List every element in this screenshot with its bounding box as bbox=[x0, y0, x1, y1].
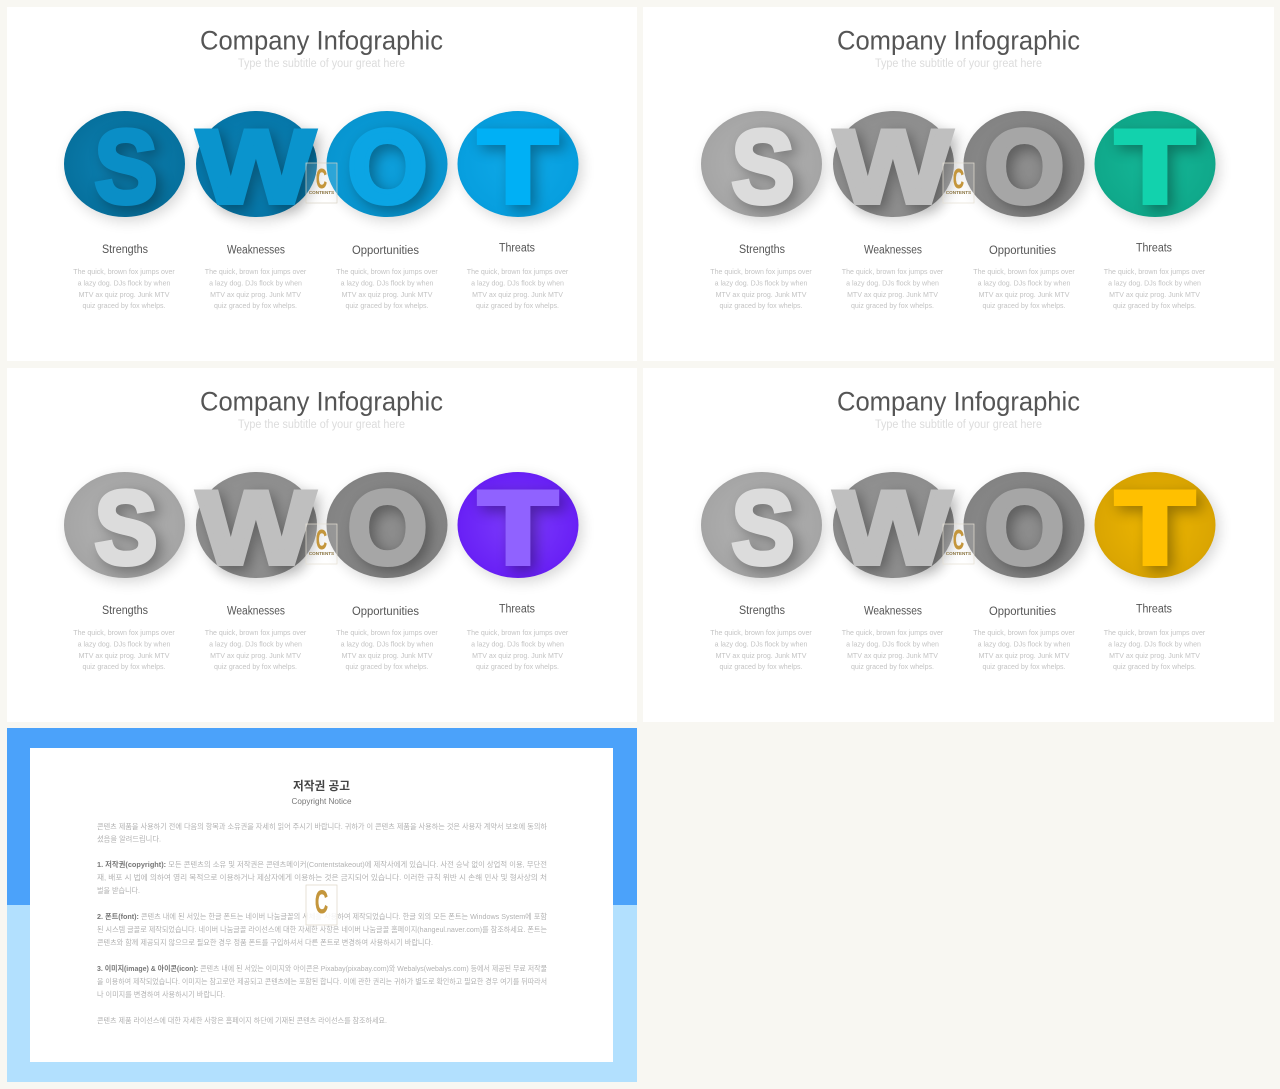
watermark: C bbox=[316, 163, 327, 194]
text: Opportunities: a lazy dog. DJs flock by when bbox=[341, 642, 433, 648]
text: Strengths: a lazy dog. DJs flock by when bbox=[78, 280, 170, 288]
text: Threats: a lazy dog. DJs flock by when bbox=[471, 642, 564, 648]
text: Strengths: a lazy dog. DJs flock by when bbox=[715, 280, 807, 288]
watermark: C bbox=[953, 163, 964, 194]
circle S: S bbox=[100, 114, 162, 230]
text: Weaknesses bbox=[205, 269, 307, 310]
text: Opportunities: MTV ax quiz prog. Junk MTV bbox=[979, 653, 1070, 660]
section 1: copyright: 벌을 받습니다. bbox=[97, 886, 140, 895]
circle O bbox=[964, 110, 1088, 230]
text: Opportunities: a lazy dog. DJs flock by when bbox=[978, 280, 1070, 288]
section 2: font bbox=[97, 912, 547, 947]
text: Strengths: MTV ax quiz prog. Junk MTV bbox=[716, 653, 807, 660]
text: Threats: quiz graced by fox whelps. bbox=[476, 664, 559, 671]
section 2: font: 콘텐츠와 함께 제공되지 않으므로 필요한 경우 정품 폰트를 구입하셔서 다른 폰트로 변경하여 사용하시기 바랍니다. bbox=[97, 938, 433, 947]
title: Company Infographic bbox=[200, 26, 443, 56]
circle T: T bbox=[478, 470, 558, 586]
copyright intro: 셨음을 알려드립니다. bbox=[97, 834, 161, 844]
circle T: T bbox=[1116, 470, 1194, 586]
text: Weaknesses: quiz graced by fox whelps. bbox=[214, 664, 297, 671]
circle T bbox=[1094, 110, 1219, 230]
section 3: image and icon: 나 이미지를 변경하여 사용하시기 바랍니다. bbox=[97, 990, 225, 999]
circle T: T bbox=[1116, 110, 1194, 226]
label: Opportunities: Opportunities bbox=[989, 245, 1056, 257]
label: Threats: Threats bbox=[499, 604, 535, 616]
watermark: CONTENTS bbox=[309, 190, 334, 195]
text: Weaknesses: a lazy dog. DJs flock by when bbox=[846, 642, 939, 648]
text: Threats: MTV ax quiz prog. Junk MTV bbox=[1109, 292, 1200, 299]
title: Company Infographic bbox=[837, 26, 1080, 56]
text: Threats: quiz graced by fox whelps. bbox=[476, 303, 559, 310]
text: Strengths: MTV ax quiz prog. Junk MTV bbox=[79, 653, 170, 660]
text: Threats: quiz graced by fox whelps. bbox=[1113, 303, 1196, 310]
label: Strengths: Strengths bbox=[739, 605, 785, 617]
text: Threats: MTV ax quiz prog. Junk MTV bbox=[472, 653, 563, 660]
circle S: S bbox=[94, 470, 158, 586]
watermark bbox=[943, 163, 974, 203]
text: Threats bbox=[1104, 269, 1206, 310]
circle W: W bbox=[202, 476, 320, 592]
label: Strengths: Strengths bbox=[739, 244, 785, 256]
watermark bbox=[943, 524, 974, 564]
text: Weaknesses: a lazy dog. DJs flock by when bbox=[846, 280, 939, 288]
watermark: CONTENTS bbox=[946, 551, 971, 556]
copyright subheading: Copyright Notice bbox=[292, 796, 352, 806]
circle O: O bbox=[990, 114, 1070, 230]
text: Strengths bbox=[73, 269, 175, 310]
text: Opportunities bbox=[973, 630, 1075, 671]
text: Weaknesses bbox=[205, 630, 307, 671]
subtitle: Type the subtitle of your great here bbox=[875, 419, 1042, 431]
text: Opportunities: a lazy dog. DJs flock by when bbox=[341, 280, 433, 288]
text: Threats: quiz graced by fox whelps. bbox=[1113, 664, 1196, 671]
text: Threats: MTV ax quiz prog. Junk MTV bbox=[472, 292, 563, 299]
text: Opportunities bbox=[336, 269, 438, 310]
text: Weaknesses: The quick, brown fox jumps over bbox=[205, 630, 307, 637]
circle W: W bbox=[202, 114, 320, 230]
circle W: W bbox=[202, 114, 320, 230]
text: Weaknesses: MTV ax quiz prog. Junk MTV bbox=[210, 292, 301, 299]
section 1: copyright bbox=[97, 860, 547, 895]
label: Weaknesses: Weaknesses bbox=[227, 606, 285, 618]
section 2: font: 된 시스템 글꼴로 제작되었습니다. 네이버 나눔글꼴 라이선스에 대한 자세한 사항은 네이버 나눔글꼴 홈페이지(hangeul.naver.com)를 참조하세요. 폰트는 bbox=[97, 925, 547, 934]
text: Threats bbox=[467, 630, 569, 671]
label: Threats: Threats bbox=[1136, 604, 1172, 616]
section 3: image and icon: 을 이용하여 제작되었습니다. 이미지는 참고로만 제공되고 콘텐츠에는 포함된 합니다. 이에 관한 권리는 귀하가 별도로 확인하고 필요한 경우 여기를 뒤따라서 bbox=[97, 977, 547, 986]
text: Opportunities: a lazy dog. DJs flock by when bbox=[978, 642, 1070, 648]
title: Company Infographic bbox=[837, 386, 1080, 416]
circle S: S bbox=[732, 110, 794, 226]
panel: SWOT green bbox=[643, 7, 1274, 361]
watermark: C bbox=[315, 884, 328, 920]
text: Threats bbox=[1104, 630, 1206, 671]
text: Strengths: The quick, brown fox jumps over bbox=[710, 269, 812, 276]
title: Company Infographic bbox=[200, 386, 443, 416]
text: Weaknesses: MTV ax quiz prog. Junk MTV bbox=[210, 653, 301, 660]
watermark bbox=[306, 884, 337, 925]
section 1: copyright: 1. 저작권(copyright): 모든 콘텐츠의 소유 및 저작권은 콘텐츠메이커(Contentstakeout)에 제작사에게 있습니다. 사전 승낙 없이 상업적 이용, 무단전 bbox=[97, 860, 547, 869]
panel: SWOT purple bbox=[7, 368, 637, 722]
section 1: copyright: 재, 배포 시 법에 의하여 영리 목적으로 이용하거나 제삼자에게 이용하는 것은 금지되어 있습니다. 이러한 규칙 위반 시 손해 민사 및 형사상의 처 bbox=[97, 873, 547, 882]
label: Strengths: Strengths bbox=[102, 605, 148, 617]
text: Weaknesses bbox=[842, 630, 944, 671]
section 3: image and icon bbox=[97, 964, 547, 999]
circle W: W bbox=[198, 110, 315, 226]
circle O: O bbox=[352, 114, 432, 230]
text: Opportunities bbox=[973, 269, 1075, 310]
text: Strengths bbox=[73, 630, 175, 671]
circle O bbox=[326, 470, 451, 592]
label: Strengths: Strengths bbox=[102, 244, 148, 256]
circle O bbox=[964, 470, 1088, 592]
circle T bbox=[458, 110, 582, 230]
text: Opportunities: MTV ax quiz prog. Junk MTV bbox=[342, 653, 433, 660]
circle T: T bbox=[484, 476, 562, 592]
text: Opportunities: quiz graced by fox whelps. bbox=[982, 664, 1066, 671]
text: Threats: a lazy dog. DJs flock by when bbox=[1108, 642, 1201, 648]
text: Opportunities bbox=[336, 630, 438, 671]
circle T: T bbox=[484, 114, 562, 230]
text: Weaknesses: quiz graced by fox whelps. bbox=[851, 303, 934, 310]
text: Strengths: quiz graced by fox whelps. bbox=[719, 303, 803, 310]
circle O: O bbox=[984, 110, 1064, 226]
watermark bbox=[306, 524, 337, 564]
text: Opportunities: MTV ax quiz prog. Junk MTV bbox=[979, 292, 1070, 299]
text: Threats: a lazy dog. DJs flock by when bbox=[471, 280, 564, 288]
copyright intro bbox=[97, 822, 547, 844]
label: Weaknesses: Weaknesses bbox=[227, 244, 285, 256]
circle W: W bbox=[840, 114, 957, 230]
circle S: S bbox=[732, 470, 794, 586]
subtitle: Type the subtitle of your great here bbox=[238, 58, 405, 70]
text: Weaknesses: a lazy dog. DJs flock by when bbox=[209, 280, 302, 288]
text: Weaknesses: The quick, brown fox jumps over bbox=[205, 269, 307, 276]
circle T: T bbox=[478, 110, 558, 226]
copyright heading: 저작권 공고 bbox=[293, 778, 350, 793]
text: Strengths: a lazy dog. DJs flock by when bbox=[78, 642, 170, 648]
text: Strengths: The quick, brown fox jumps over bbox=[73, 630, 175, 637]
text: Weaknesses bbox=[842, 269, 944, 310]
copyright intro: 콘텐츠 제품을 사용하기 전에 다음의 항목과 소유권을 자세히 읽어 주시기 바랍니다. 귀하가 이 콘텐츠 제품을 사용하는 것은 사용자 계약서 보호에 동의하 bbox=[97, 822, 547, 831]
label: Threats: Threats bbox=[499, 242, 535, 254]
text: Threats: The quick, brown fox jumps over bbox=[1104, 630, 1206, 637]
text: Weaknesses: MTV ax quiz prog. Junk MTV bbox=[847, 292, 938, 299]
text: Strengths: quiz graced by fox whelps. bbox=[719, 664, 803, 671]
panel: SWOT blue bbox=[7, 7, 637, 361]
section 3: image and icon: 3. 이미지(image) & 아이콘(icon): 콘텐츠 내에 된 서있는 이미지와 아이콘은 Pixabay(pixabay.com)와 Webalys(webalys.com) 등에서 제공된 무료 저작물 bbox=[97, 964, 547, 973]
circle S: S bbox=[736, 476, 800, 592]
text: Opportunities: The quick, brown fox jumps over bbox=[973, 630, 1075, 637]
circle S: S bbox=[94, 110, 158, 226]
circle S: S bbox=[100, 476, 162, 592]
circle S bbox=[701, 470, 825, 592]
watermark bbox=[306, 163, 337, 203]
label: Opportunities: Opportunities bbox=[352, 606, 419, 618]
circle S bbox=[64, 470, 188, 592]
text: Strengths: MTV ax quiz prog. Junk MTV bbox=[716, 292, 807, 299]
circle O: O bbox=[984, 470, 1064, 586]
text: Strengths bbox=[710, 630, 812, 671]
text: Weaknesses: a lazy dog. DJs flock by when bbox=[209, 642, 302, 648]
circle T: T bbox=[1120, 114, 1200, 230]
subtitle: Type the subtitle of your great here bbox=[238, 419, 405, 431]
panel: copyright notice bbox=[7, 728, 637, 1082]
text: Strengths: The quick, brown fox jumps over bbox=[710, 630, 812, 637]
circle W: W bbox=[840, 114, 957, 230]
text: Threats: The quick, brown fox jumps over bbox=[467, 630, 569, 637]
label: Threats: Threats bbox=[1136, 242, 1172, 254]
text: Opportunities: MTV ax quiz prog. Junk MTV bbox=[342, 292, 433, 299]
circle S: S bbox=[736, 114, 800, 230]
subtitle: Type the subtitle of your great here bbox=[875, 58, 1042, 70]
text: Strengths: quiz graced by fox whelps. bbox=[82, 664, 166, 671]
label: Weaknesses: Weaknesses bbox=[864, 244, 922, 256]
text: Strengths: MTV ax quiz prog. Junk MTV bbox=[79, 292, 170, 299]
watermark: C bbox=[316, 524, 327, 555]
text: Opportunities: quiz graced by fox whelps. bbox=[345, 303, 429, 310]
circle S bbox=[64, 110, 188, 230]
text: Weaknesses: quiz graced by fox whelps. bbox=[214, 303, 297, 310]
circle T bbox=[458, 470, 582, 592]
circle W: W bbox=[840, 476, 957, 592]
text: Weaknesses: MTV ax quiz prog. Junk MTV bbox=[847, 653, 938, 660]
circle W: W bbox=[840, 476, 957, 592]
label: Opportunities: Opportunities bbox=[989, 606, 1056, 618]
label: Weaknesses: Weaknesses bbox=[864, 606, 922, 618]
circle T bbox=[1094, 470, 1219, 592]
text: Threats: The quick, brown fox jumps over bbox=[467, 269, 569, 276]
text: Strengths: a lazy dog. DJs flock by when bbox=[715, 642, 807, 648]
text: Threats: a lazy dog. DJs flock by when bbox=[1108, 280, 1201, 288]
text: Opportunities: The quick, brown fox jumps over bbox=[336, 269, 438, 276]
text: Strengths: quiz graced by fox whelps. bbox=[82, 303, 166, 310]
text: Opportunities: quiz graced by fox whelps. bbox=[982, 303, 1066, 310]
panel: SWOT yellow bbox=[643, 368, 1274, 722]
closing note: 콘텐츠 제품 라이선스에 대한 자세한 사항은 홈페이지 하단에 기재된 콘텐츠 라이선스를 참조하세요. bbox=[97, 1016, 387, 1025]
text: Weaknesses: quiz graced by fox whelps. bbox=[851, 664, 934, 671]
text: Weaknesses: The quick, brown fox jumps over bbox=[842, 269, 944, 276]
text: Strengths: The quick, brown fox jumps over bbox=[73, 269, 175, 276]
circle W: W bbox=[834, 470, 952, 586]
circle O bbox=[326, 110, 451, 230]
circle O: O bbox=[352, 476, 432, 592]
circle W: W bbox=[202, 476, 320, 592]
text: Threats bbox=[467, 269, 569, 310]
circle S bbox=[701, 110, 825, 230]
circle O: O bbox=[990, 476, 1070, 592]
watermark: C bbox=[953, 524, 964, 555]
text: Opportunities: The quick, brown fox jumps over bbox=[973, 269, 1075, 276]
watermark: CONTENTS bbox=[309, 551, 334, 556]
text: Weaknesses: The quick, brown fox jumps over bbox=[842, 630, 944, 637]
section 2: font: 2. 폰트(font): 콘텐츠 내에 된 서있는 한글 폰트는 네이버 나눔글꼴의 서체를 사용하여 제작되었습니다. 한글 외의 모든 폰트는 Windows System에 포함 bbox=[97, 912, 547, 921]
circle T: T bbox=[1120, 476, 1200, 592]
label: Opportunities: Opportunities bbox=[352, 245, 419, 257]
text: Opportunities: The quick, brown fox jumps over bbox=[336, 630, 438, 637]
watermark: CONTENTS bbox=[946, 190, 971, 195]
circle W: W bbox=[198, 470, 315, 586]
circle W: W bbox=[834, 110, 952, 226]
circle O: O bbox=[348, 470, 428, 586]
text: Threats: The quick, brown fox jumps over bbox=[1104, 269, 1206, 276]
circle O: O bbox=[348, 110, 428, 226]
text: Opportunities: quiz graced by fox whelps. bbox=[345, 664, 429, 671]
text: Threats: MTV ax quiz prog. Junk MTV bbox=[1109, 653, 1200, 660]
text: Strengths bbox=[710, 269, 812, 310]
